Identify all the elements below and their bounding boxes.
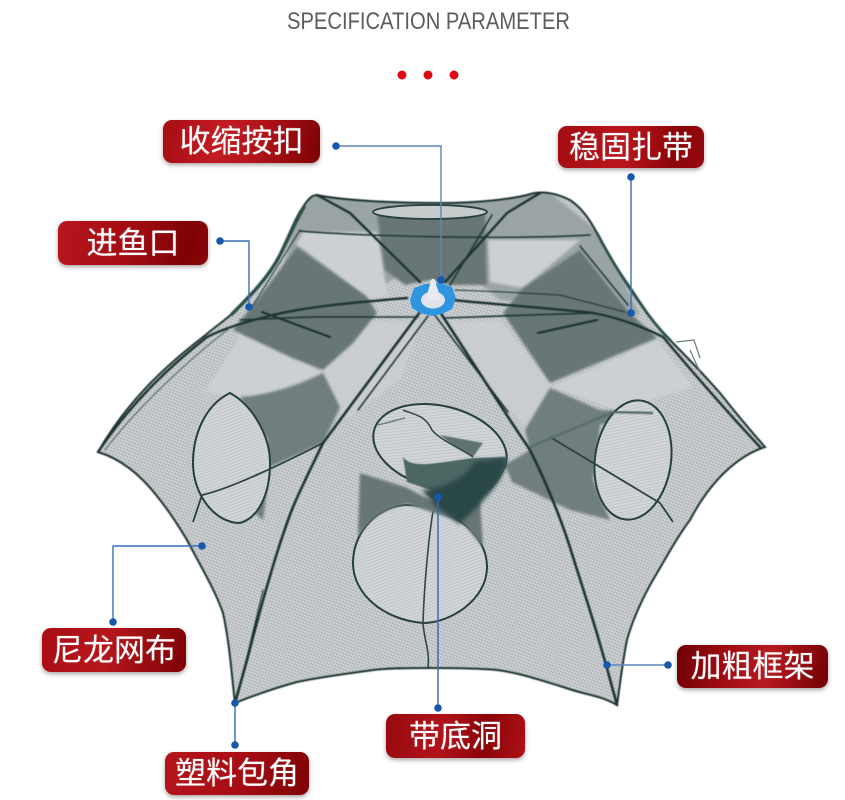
connector: 进鱼口 <box>216 237 253 311</box>
window: right ring <box>530 395 679 525</box>
decorative red dots <box>398 70 458 80</box>
label: 加粗框架 <box>677 645 828 688</box>
inner net panels <box>205 187 693 520</box>
right upper dark panel <box>503 250 657 383</box>
top mesh band <box>275 187 640 315</box>
right lower dark panel <box>506 387 616 521</box>
connector: 带底洞 <box>434 493 442 712</box>
label: 收缩按扣 <box>163 120 320 163</box>
label: 加粗框架: 加粗框架 <box>690 649 814 684</box>
entrance funnel with opening <box>358 391 516 547</box>
left lower dark panel <box>240 373 340 520</box>
connector: 塑料包角 <box>231 699 239 749</box>
label: 稳固扎带: 稳固扎带 <box>569 130 693 164</box>
connector: 稳固扎带 <box>627 173 635 317</box>
connector: 尼龙网布 <box>109 542 206 626</box>
label: 尼龙网布 <box>42 628 186 672</box>
connector lines <box>109 142 672 749</box>
label: 带底洞: 带底洞 <box>409 718 502 754</box>
central cylinder <box>377 214 487 285</box>
hub button <box>410 279 456 316</box>
net body <box>98 192 765 705</box>
label: 带底洞 <box>386 714 525 758</box>
left upper dark panel <box>233 247 377 370</box>
top ring <box>373 205 487 219</box>
fishing net trap <box>98 187 765 705</box>
net frame ribs <box>98 192 765 705</box>
label: 尼龙网布: 尼龙网布 <box>52 632 176 668</box>
connector: 收缩按扣 <box>332 142 445 284</box>
connector: 加粗框架 <box>603 661 672 669</box>
window: left ring <box>193 393 323 523</box>
window: lower centre ring <box>353 505 487 668</box>
label: 塑料包角: 塑料包角 <box>175 756 299 791</box>
label: 进鱼口 <box>58 221 208 265</box>
label: 收缩按扣: 收缩按扣 <box>180 124 304 159</box>
pale patches <box>296 232 388 297</box>
bracket on right frame <box>676 340 700 372</box>
label: 进鱼口: 进鱼口 <box>86 226 180 260</box>
